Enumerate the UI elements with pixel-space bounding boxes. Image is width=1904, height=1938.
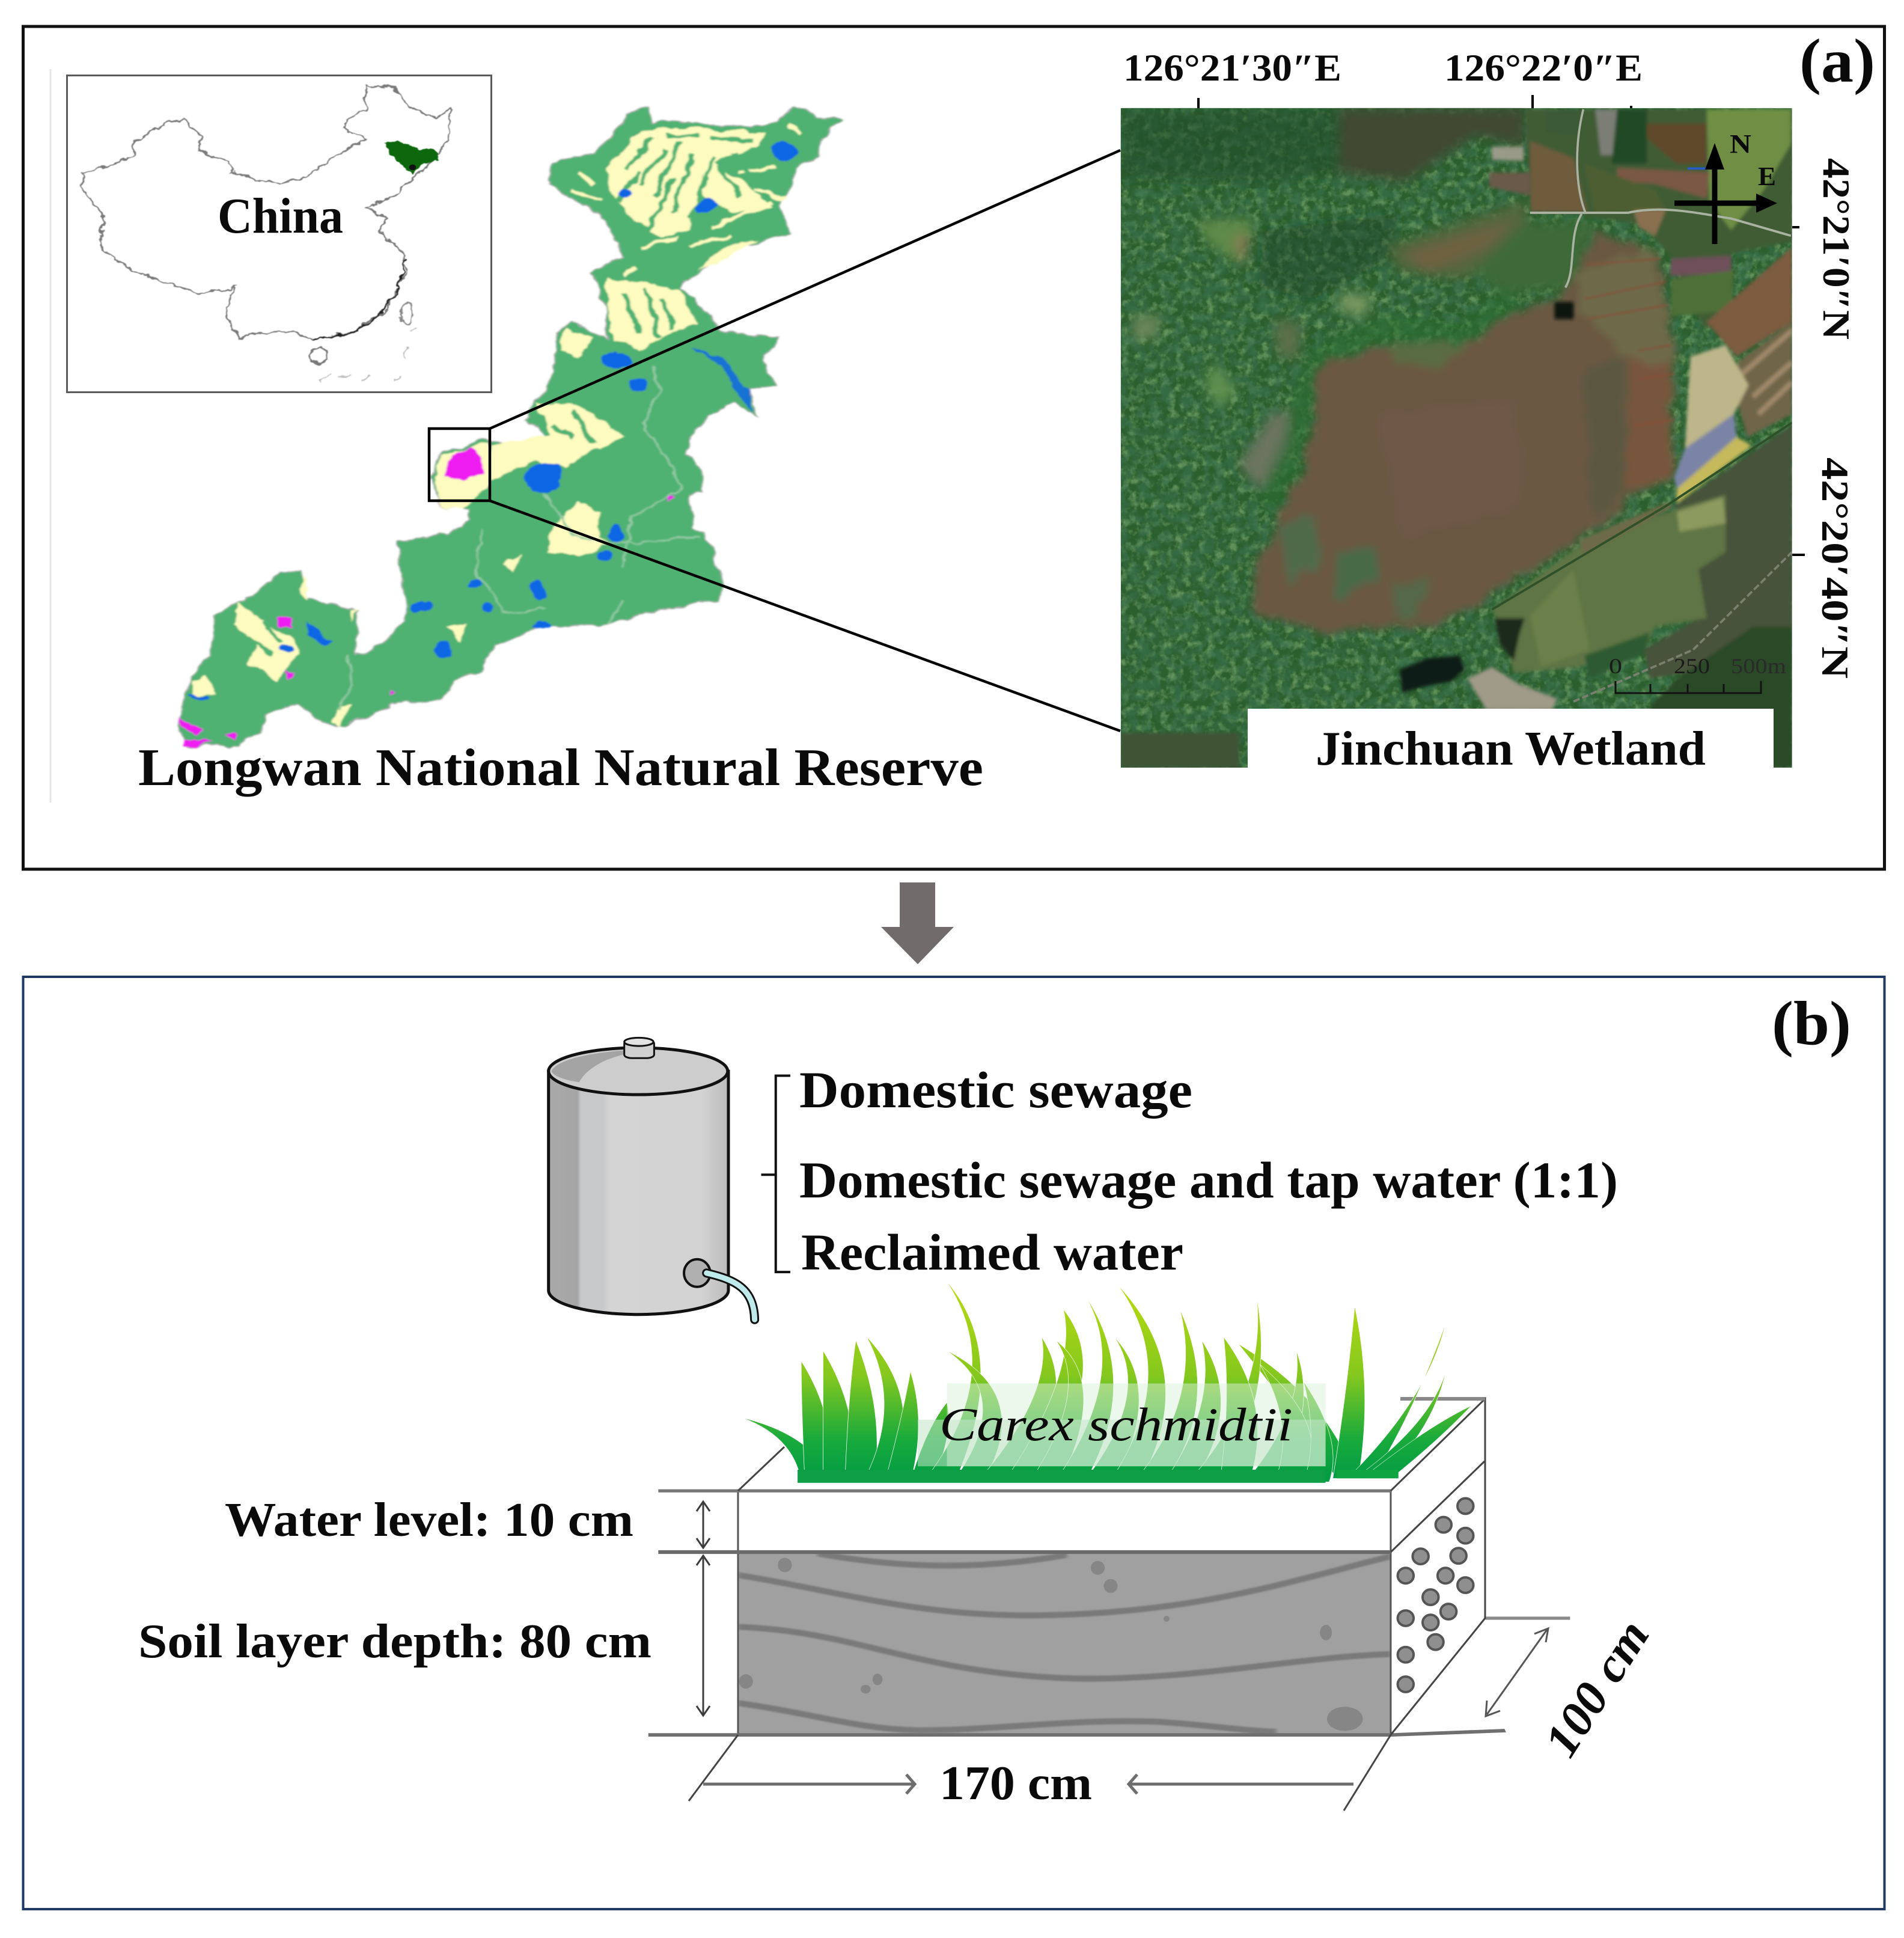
scale bar: 250 [1674, 654, 1710, 678]
arrow: (a) to (b) [881, 882, 954, 964]
panel label (a): (a) [1799, 26, 1875, 96]
compass arrows N / E [1674, 129, 1777, 244]
white label strip: Jinchuan Wetland: Jinchuan Wetland [1316, 723, 1706, 775]
scale bar: 500m [1731, 654, 1786, 678]
species label: Carex schmidtii [939, 1398, 1293, 1450]
brown peat [1253, 230, 1674, 629]
arrows: water level and soil depth [697, 1502, 710, 1716]
dimension labels: 170 cm [939, 1757, 1092, 1810]
panel: (a) study area [23, 26, 1885, 869]
longitude labels: 126°22′0″E [1444, 46, 1643, 89]
label: China: China [218, 188, 343, 244]
bracket: water sources [761, 1075, 790, 1272]
scale bar [1609, 654, 1786, 693]
soil pores on side face [1398, 1499, 1474, 1692]
plants: Carex schmidtii grass [743, 1282, 1471, 1483]
map title: Longwan National Natural Reserve: Longwan National Natural Reserve [138, 739, 983, 797]
zoom box and connector lines [429, 150, 1120, 731]
text: water source options: Domestic sewage and tap water (1:1) [799, 1151, 1618, 1209]
box: mesocosm structure [648, 1491, 1570, 1735]
compass arrows N / E: E [1758, 162, 1776, 191]
inset map: China [67, 76, 492, 392]
panel label (b): (b) [1772, 989, 1851, 1058]
dimension labels: 100 cm [1534, 1611, 1660, 1766]
dimension labels [138, 1494, 1660, 1810]
arrows: width and depth [703, 1628, 1548, 1794]
text: water source options: Domestic sewage [799, 1061, 1192, 1119]
lower fields [1644, 426, 1792, 679]
latitude labels: 42°21′0″N [1815, 158, 1858, 340]
ponds [1400, 656, 1465, 693]
longitude labels: 126°21′30″E [1123, 46, 1341, 89]
white label strip: Jinchuan Wetland [1248, 709, 1774, 775]
satellite image: Jinchuan Wetland [1121, 108, 1792, 768]
compass arrows N / E: N [1730, 129, 1751, 159]
upper right fields [1526, 109, 1792, 328]
reserve map: Longwan [178, 106, 840, 747]
bright green fringe [1269, 299, 1514, 506]
box: side face and perspective edges [689, 1399, 1485, 1811]
dimension labels: Water level: 10 cm [225, 1494, 633, 1547]
latitude labels: 42°20′40″N [1814, 457, 1857, 679]
latitude labels [1792, 158, 1858, 679]
panel: (b) mesocosm [23, 977, 1885, 1909]
icon: water tank [549, 1038, 755, 1319]
yellow & blue strips [1685, 345, 1748, 448]
text: water source options [799, 1061, 1618, 1281]
longitude labels [1123, 46, 1643, 108]
dimension labels: Soil layer depth: 80 cm [138, 1615, 651, 1668]
text: water source options: Reclaimed water [801, 1223, 1183, 1281]
scale bar: 0 [1609, 654, 1622, 678]
